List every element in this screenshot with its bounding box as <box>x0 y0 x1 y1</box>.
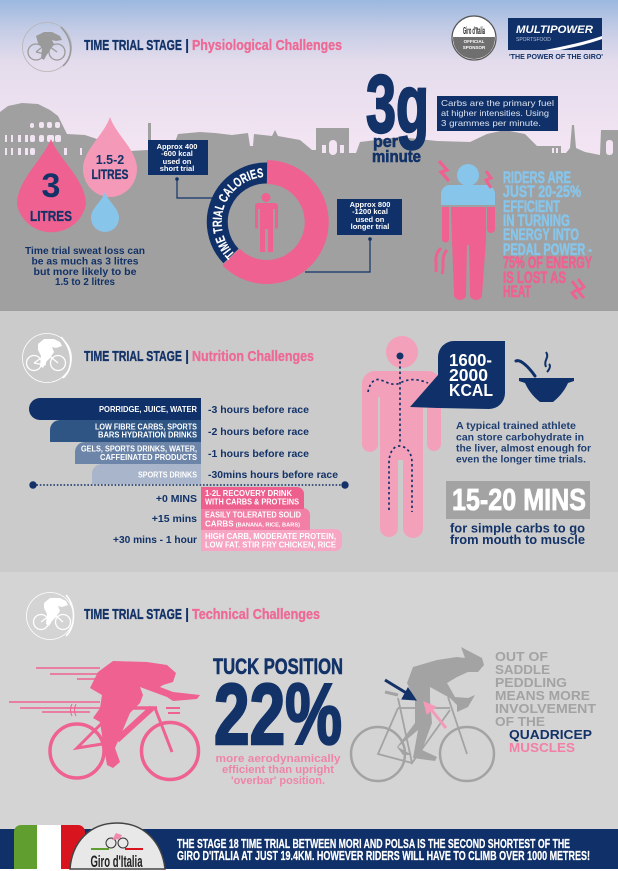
chart: pre-race nutrition timeline: EASILY TOLERATED SOLID <box>205 510 301 520</box>
text: out of saddle: MEANS MORE <box>495 688 590 703</box>
logo: giro d'italia badge: Giro d'Italia <box>90 852 143 871</box>
icon: pink tuck cyclist <box>9 661 200 780</box>
text: out of saddle: MUSCLES <box>509 740 575 755</box>
footer band <box>0 823 618 871</box>
callout: 1600-2000 kcal: 2000 <box>449 365 488 385</box>
callout: carbs fuel: 3 grammes per minute. <box>441 118 541 128</box>
chart: pre-race nutrition timeline: LOW FAT. STIR FRY CHICKEN, RICE <box>205 540 336 550</box>
text: riders efficiency <box>503 168 592 301</box>
callout: carbs fuel: at higher intensities. Using <box>441 108 549 118</box>
chart: pre-race nutrition timeline: CAFFEINATED PRODUCTS <box>100 453 197 462</box>
stat: tuck position 22%: 22% <box>214 667 342 763</box>
panel: technical challenges <box>0 572 618 830</box>
chart: pre-race nutrition timeline: BARS HYDRATION DRINKS <box>98 430 197 440</box>
callout: 15-20 mins: 15-20 MINS <box>452 482 586 517</box>
heading: physiological challenges: | <box>185 37 189 54</box>
icon: italian flag <box>14 825 85 869</box>
icon: person with heat <box>436 161 584 300</box>
chart: pre-race nutrition timeline: +15 mins <box>152 513 197 525</box>
text: out of saddle: OUT OF <box>495 649 548 664</box>
heading: technical challenges: Technical Challenges <box>192 606 320 623</box>
heading: nutrition challenges: | <box>185 348 189 365</box>
callout: longer trial calories: longer trial <box>351 222 389 231</box>
text: liver storage <box>456 420 591 466</box>
logo: official sponsor badge <box>452 16 496 60</box>
icon: 1.5-2 litre drop <box>83 117 137 197</box>
chart: pre-race nutrition timeline: SPORTS DRINKS <box>138 470 197 480</box>
callout: longer trial calories <box>305 199 402 272</box>
text: sweat loss: 1.5 to 2 litres <box>55 277 115 288</box>
text: out of saddle: PEDDLING <box>495 675 567 690</box>
stat: 3g per minute: minute <box>372 147 421 166</box>
chart: pre-race nutrition timeline: -2 hours before race <box>208 426 309 438</box>
icon: person in donut <box>255 193 278 252</box>
text: out of saddle: INVOLVEMENT <box>495 701 596 716</box>
logo: multipower: MULTIPOWER <box>516 24 593 36</box>
chart: pre-race nutrition timeline: +0 MINS <box>156 493 197 505</box>
callout: short trial calories: Approx 400 <box>157 142 197 151</box>
stat: 3g per minute: 3g <box>366 59 429 150</box>
chart: pre-race nutrition timeline: -3 hours before race <box>208 404 309 416</box>
text: simple carbs: from mouth to muscle <box>450 533 585 547</box>
chart: pre-race nutrition timeline <box>29 398 349 551</box>
callout: short trial calories <box>148 140 213 198</box>
chart: pre-race nutrition timeline: -1 hours before race <box>208 448 309 460</box>
icon: cyclist badge white <box>22 334 72 382</box>
chart: time trial calories donut <box>206 160 329 284</box>
text: aerodynamic comparison <box>216 753 341 787</box>
text: aerodynamic comparison: efficient than upright <box>222 764 334 776</box>
icon: cyclist badge grey <box>22 22 72 72</box>
callout: 1600-2000 kcal <box>410 341 505 409</box>
text: aerodynamic comparison: more aerodynamically <box>216 753 341 765</box>
heading: physiological challenges: Physiological Challenges <box>192 37 342 54</box>
icon: cyclist badge white small <box>26 592 74 640</box>
callout: 1600-2000 kcal: 1600- <box>449 350 492 370</box>
text: riders efficiency: EFFICIENT <box>503 197 560 216</box>
callout: longer trial calories: -1200 kcal <box>352 207 388 216</box>
chart: pre-race nutrition timeline: WITH CARBS & PROTEINS <box>205 498 299 506</box>
callout: longer trial calories: used on <box>356 215 385 224</box>
text: out of saddle: SADDLE <box>495 662 550 677</box>
text: liver storage: the liver, almost enough for <box>456 442 591 454</box>
text: riders efficiency: ENERGY INTO <box>503 225 579 244</box>
text: out of saddle <box>495 649 596 755</box>
heading: technical challenges: TIME TRIAL STAGE <box>84 606 182 623</box>
icon: 3 litre drop: 3 <box>42 167 60 205</box>
text: liver storage: can store carbohydrate in <box>456 432 584 444</box>
stat: 3g per minute <box>366 59 429 166</box>
text: sweat loss <box>25 246 145 288</box>
stat: tuck position 22% <box>213 654 343 763</box>
chart: pre-race nutrition timeline: PORRIDGE, JUICE, WATER <box>99 405 197 414</box>
text: sweat loss: but more likely to be <box>34 267 137 278</box>
logo: official sponsor badge: OFFICIAL <box>464 39 485 44</box>
text: out of saddle: OF THE <box>495 714 545 729</box>
chart: pre-race nutrition timeline: +30 mins - 1 hour <box>113 534 197 546</box>
chart: pre-race nutrition timeline: 1-2L RECOVERY DRINK <box>205 489 292 498</box>
text: riders efficiency: RIDERS ARE <box>503 168 571 187</box>
callout: short trial calories: used on <box>163 157 192 166</box>
heading: nutrition challenges: TIME TRIAL STAGE <box>84 348 182 365</box>
stat: 3g per minute: per <box>373 132 398 151</box>
logo: multipower <box>508 18 603 61</box>
callout: 1600-2000 kcal: KCAL <box>449 380 493 400</box>
chart: pre-race nutrition timeline: GELS, SPORTS DRINKS, WATER, <box>81 444 197 454</box>
icon: 1.5-2 litre drop: 1.5-2 <box>96 153 124 167</box>
text: simple carbs: for simple carbs to go <box>450 522 585 536</box>
heading: technical challenges: | <box>185 606 189 623</box>
chart: pre-race nutrition timeline: -30mins hours before race <box>208 469 338 481</box>
logo: multipower: 'THE POWER OF THE GIRO' <box>509 52 603 61</box>
arrow: navy to glute <box>385 680 416 700</box>
text: riders efficiency: IN TURNING <box>503 211 570 230</box>
text: stage 18 summary <box>177 836 590 863</box>
chart: pre-race nutrition timeline: LOW FIBRE CARBS, SPORTS <box>95 422 197 432</box>
callout: carbs fuel <box>437 96 558 131</box>
callout: short trial calories: short trial <box>160 164 194 173</box>
text: sweat loss: be as much as 3 litres <box>32 256 139 268</box>
logo: giro d'italia badge <box>70 823 165 871</box>
heading: nutrition challenges: Nutrition Challenges <box>192 348 314 365</box>
icon: 1.5-2 litre drop: LITRES <box>92 166 128 182</box>
panel: physiological challenges <box>0 0 618 311</box>
chart: time trial calories donut: TIME TRIAL CALORIES <box>212 168 264 260</box>
callout: carbs fuel: Carbs are the primary fuel <box>441 98 554 108</box>
icon: out of saddle cyclist <box>351 647 494 781</box>
logo: official sponsor badge: SPONSOR <box>463 45 486 50</box>
stat: tuck position 22%: TUCK POSITION <box>213 654 343 679</box>
panel: nutrition challenges <box>0 311 618 572</box>
text: aerodynamic comparison: 'overbar' position. <box>231 775 325 787</box>
skyline of Rome <box>0 103 618 311</box>
callout: longer trial calories: Approx 800 <box>350 200 390 209</box>
icon: 3 litre drop <box>17 139 86 232</box>
icon: body with liver carbohydrate paths <box>362 336 441 538</box>
text: simple carbs <box>450 522 585 547</box>
chart: pre-race nutrition timeline: CARBS (BANANA, RICE, BARS) <box>205 520 300 528</box>
arrow: pink to quadricep <box>424 702 446 728</box>
icon: 3 litre drop: LITRES <box>30 208 72 225</box>
text: riders efficiency: IS LOST AS <box>503 268 566 287</box>
callout: short trial calories: -600 kcal <box>161 149 193 158</box>
text: riders efficiency: JUST 20-25% <box>503 182 581 201</box>
text: liver storage: even the longer time trials. <box>456 454 586 466</box>
text: riders efficiency: HEAT <box>503 282 531 301</box>
text: sweat loss: Time trial sweat loss can <box>25 246 145 257</box>
logo: multipower: SPORTSFOOD <box>516 37 551 43</box>
icon: steaming bowl <box>516 352 574 402</box>
logo: official sponsor badge: Giro d'Italia <box>463 26 485 37</box>
text: out of saddle: QUADRICEP <box>509 727 592 742</box>
chart: pre-race nutrition timeline: HIGH CARB, MODERATE PROTEIN, <box>205 532 336 541</box>
text: liver storage: A typical trained athlete <box>456 420 576 432</box>
icon: blue water drop <box>91 192 119 232</box>
heading: physiological challenges: TIME TRIAL STAGE <box>84 37 182 54</box>
